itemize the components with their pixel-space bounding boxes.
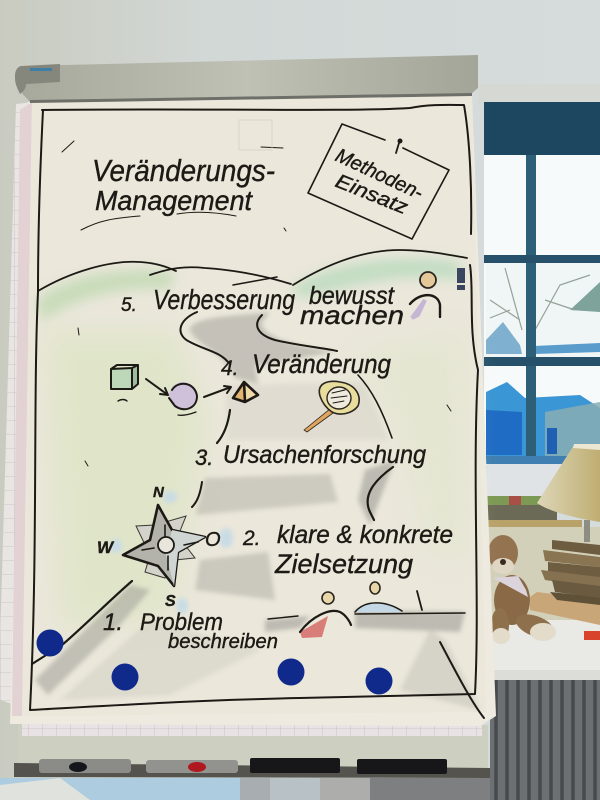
step 1 [103,609,278,653]
marker: black permanent [250,758,340,773]
title: Veränderungs- [92,153,275,188]
arrow: cube to sphere [146,379,168,395]
icon: compass rose: N [153,484,165,501]
wooden stack with lamp [530,444,600,625]
icon: compass rose: W [97,538,115,557]
step 3: 3. [195,445,213,470]
lower board with marker tray [0,724,490,800]
icon: cube [111,365,138,401]
paper sheet stack [10,95,496,726]
note: Methoden-Einsatz: Methoden- [332,145,427,204]
grey winding road [35,312,480,710]
marker: black chisel [357,759,447,774]
green hills wash [36,258,460,322]
step 1: Problem [140,609,223,636]
tray [14,763,490,778]
drawn frame [30,105,478,710]
stand and floor [0,778,320,800]
title: Management [95,185,253,216]
table [490,620,600,680]
window [484,102,600,465]
icon: two persons at the road [268,582,465,638]
step 2 [242,521,453,579]
hills outline [38,250,467,291]
step 1: beschreiben [168,631,278,653]
wall under window [487,464,600,622]
magnets [36,630,392,694]
icon: compass rose: S [165,593,176,610]
icon: magnifying glass [304,381,359,432]
icon: compass rose [97,484,233,614]
teddy bear [488,535,557,644]
top bar of flip chart [15,55,478,103]
note: Methoden-Einsatz [308,124,449,239]
marker: red [146,760,238,773]
step 5: bewusst [309,282,395,310]
icon: person with exclamation mark [410,268,465,318]
step 4: 4. [221,357,239,380]
step 5: machen [300,300,404,330]
step 1: 1. [103,609,123,636]
icon: pyramid [233,382,258,402]
window frame [526,155,536,460]
step 5: Verbesserung [153,284,295,315]
title [81,153,275,230]
grid paper behind chart [0,102,34,710]
marker: black [39,759,131,773]
lamp shade [537,445,600,522]
step 2: 2. [242,527,261,550]
step 5 [121,282,404,330]
arrow: sphere to pyramid [204,386,231,397]
green meadow wash [45,330,470,630]
step 2: Zielsetzung [274,549,413,579]
note: Methoden-Einsatz: Einsatz [332,170,411,219]
step 3: Ursachenforschung [223,441,426,469]
trees and houses behind window [486,263,600,458]
ceiling band [478,84,600,104]
radiator [490,678,600,800]
icon: sphere [169,382,197,415]
step 5: 5. [121,295,137,316]
road outlines [32,312,484,718]
icon: pin [396,138,402,153]
step 2: klare & konkrete [277,521,453,549]
icon: compass rose: O [205,529,221,551]
step 4: Veränderung [252,349,391,379]
